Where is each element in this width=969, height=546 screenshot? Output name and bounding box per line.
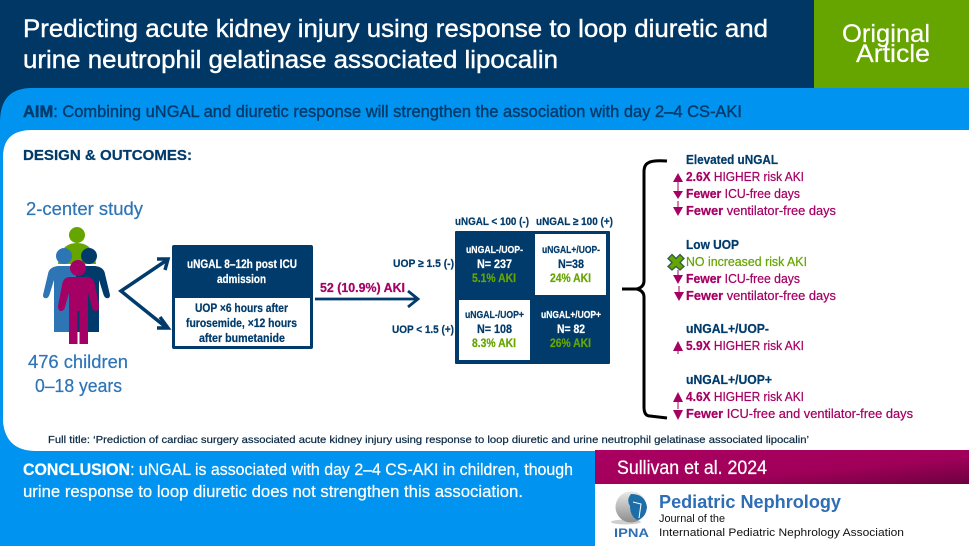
icon: up arrow — [673, 341, 683, 354]
conclusion panel: CONCLUSION: uNGAL is associated with day 2–4 CS-AKI in children, though — [23, 461, 573, 479]
results: uNGAL+/UOP+: Fewer ICU-free and ventilator-free days — [686, 407, 913, 421]
results: low UOP: Fewer ICU-free days — [686, 272, 800, 286]
cohort label — [28, 351, 128, 396]
icon: down arrow — [673, 270, 683, 284]
cell: uNGAL-/UOP-: uNGAL-/UOP- — [466, 244, 523, 256]
results: uNGAL+/UOP+: uNGAL+/UOP+ — [686, 373, 772, 387]
cell: uNGAL+/UOP-: N=38 — [558, 259, 585, 271]
box: measurements — [172, 245, 313, 349]
column headers: uNGAL ≥ 100 (+) — [536, 216, 613, 228]
box: measurements: after bumetanide — [199, 333, 285, 345]
results: low UOP: NO increased risk AKI — [686, 255, 807, 269]
results: uNGAL+/UOP-: 5.9X HIGHER risk AKI — [686, 339, 804, 353]
cell: uNGAL+/UOP- — [535, 234, 606, 295]
box: measurements: uNGAL 8–12h post ICU — [187, 259, 297, 271]
cell: uNGAL-/UOP-: 5.1% AKI — [472, 273, 516, 285]
journal name: Pediatric Nephrology — [659, 491, 842, 512]
cell: uNGAL+/UOP-: uNGAL+/UOP- — [542, 244, 600, 256]
icon: IPNA logo: IPNA — [614, 526, 649, 540]
article type badge: Article — [856, 40, 930, 68]
arrow: 52 AKI outcome: 52 (10.9%) AKI — [320, 281, 405, 295]
title — [23, 15, 768, 74]
citation bar — [595, 450, 969, 484]
header banner — [0, 0, 969, 125]
cohort label: 0–18 years — [35, 375, 122, 396]
journal subtitle: Journal of the — [659, 513, 725, 525]
cell: uNGAL+/UOP+: N= 82 — [557, 324, 585, 336]
cell: uNGAL+/UOP+ — [541, 309, 601, 350]
results: uNGAL+/UOP+ — [673, 373, 913, 421]
cell: uNGAL-/UOP+: uNGAL-/UOP+ — [465, 309, 524, 321]
box: measurements: UOP ×6 hours after — [195, 303, 288, 315]
results: uNGAL+/UOP- — [673, 322, 804, 354]
cell: uNGAL-/UOP-: N= 237 — [477, 259, 512, 271]
conclusion panel — [0, 130, 600, 546]
heading: design and outcomes: DESIGN & OUTCOMES: — [23, 148, 192, 164]
arrow: 52 AKI outcome — [315, 281, 418, 307]
results: elevated uNGAL: 2.6X HIGHER risk AKI — [686, 170, 804, 184]
journal block — [595, 484, 969, 546]
arrow: split to measurements — [121, 259, 168, 328]
results: elevated uNGAL — [673, 153, 836, 218]
icon: group of children — [43, 227, 110, 344]
results: low UOP — [668, 238, 836, 303]
results: elevated uNGAL: Fewer ventilator-free days — [686, 204, 836, 218]
cell: uNGAL+/UOP+: 26% AKI — [550, 338, 591, 350]
icon: IPNA logo — [611, 492, 649, 540]
article type badge: Original — [842, 20, 930, 48]
citation bar: Sullivan et al. 2024 — [617, 458, 767, 479]
column headers — [455, 216, 613, 228]
icon: down arrow — [673, 191, 683, 199]
box: measurements: furosemide, ×12 hours — [186, 318, 297, 330]
results: elevated uNGAL: Fewer ICU-free days — [686, 187, 800, 201]
cell: uNGAL-/UOP- — [466, 244, 523, 285]
article type badge — [814, 0, 969, 88]
results: uNGAL+/UOP+: 4.6X HIGHER risk AKI — [686, 390, 804, 404]
box: measurements: admission — [217, 274, 266, 286]
cell: uNGAL+/UOP-: 24% AKI — [550, 273, 591, 285]
journal subtitle: International Pediatric Nephrology Association — [659, 527, 904, 539]
icon: up arrow — [673, 392, 683, 409]
row headers — [392, 258, 454, 336]
matrix: uNGAL by UOP groups — [455, 231, 610, 364]
results: uNGAL+/UOP-: uNGAL+/UOP- — [686, 322, 769, 336]
cell: uNGAL+/UOP+: uNGAL+/UOP+ — [541, 309, 601, 321]
cell: uNGAL-/UOP+: N= 108 — [477, 324, 513, 336]
panel: design and outcomes — [3, 130, 969, 451]
column headers: uNGAL < 100 (-) — [455, 216, 529, 228]
results: low UOP: Fewer ventilator-free days — [686, 289, 836, 303]
study label: 2-center study — [26, 198, 144, 219]
icon: down arrow — [673, 410, 683, 420]
icon: up arrow — [673, 173, 683, 191]
icon: green cross — [668, 254, 684, 270]
title: urine neutrophil gelatinase associated lipocalin — [23, 46, 558, 74]
journal subtitle — [659, 513, 904, 539]
aim bar: AIM: Combining uNGAL and diuretic response will strengthen the association with day 2–4 CS-AKI — [23, 103, 742, 121]
icon: down arrow — [674, 286, 684, 301]
icon: down arrow — [673, 201, 683, 216]
cell: uNGAL-/UOP+ — [459, 300, 530, 360]
conclusion panel: urine response to loop diuretic does not strengthen this association. — [23, 483, 523, 501]
row headers: UOP ≥ 1.5 (-) — [393, 258, 454, 270]
results: elevated uNGAL: Elevated uNGAL — [686, 153, 778, 167]
results: low UOP: Low UOP — [686, 238, 739, 252]
cell: uNGAL-/UOP+: 8.3% AKI — [472, 338, 516, 350]
cohort label: 476 children — [28, 351, 128, 372]
aim bar — [0, 88, 969, 160]
brace — [622, 161, 667, 418]
full title note: Full title: ‘Prediction of cardiac surgery associated acute kidney injury using response to loop diuretic and urine neutrophil gelatinase associated lipocalin’ — [48, 434, 809, 446]
row headers: UOP < 1.5 (+) — [392, 324, 454, 336]
title: Predicting acute kidney injury using response to loop diuretic and — [23, 15, 768, 43]
